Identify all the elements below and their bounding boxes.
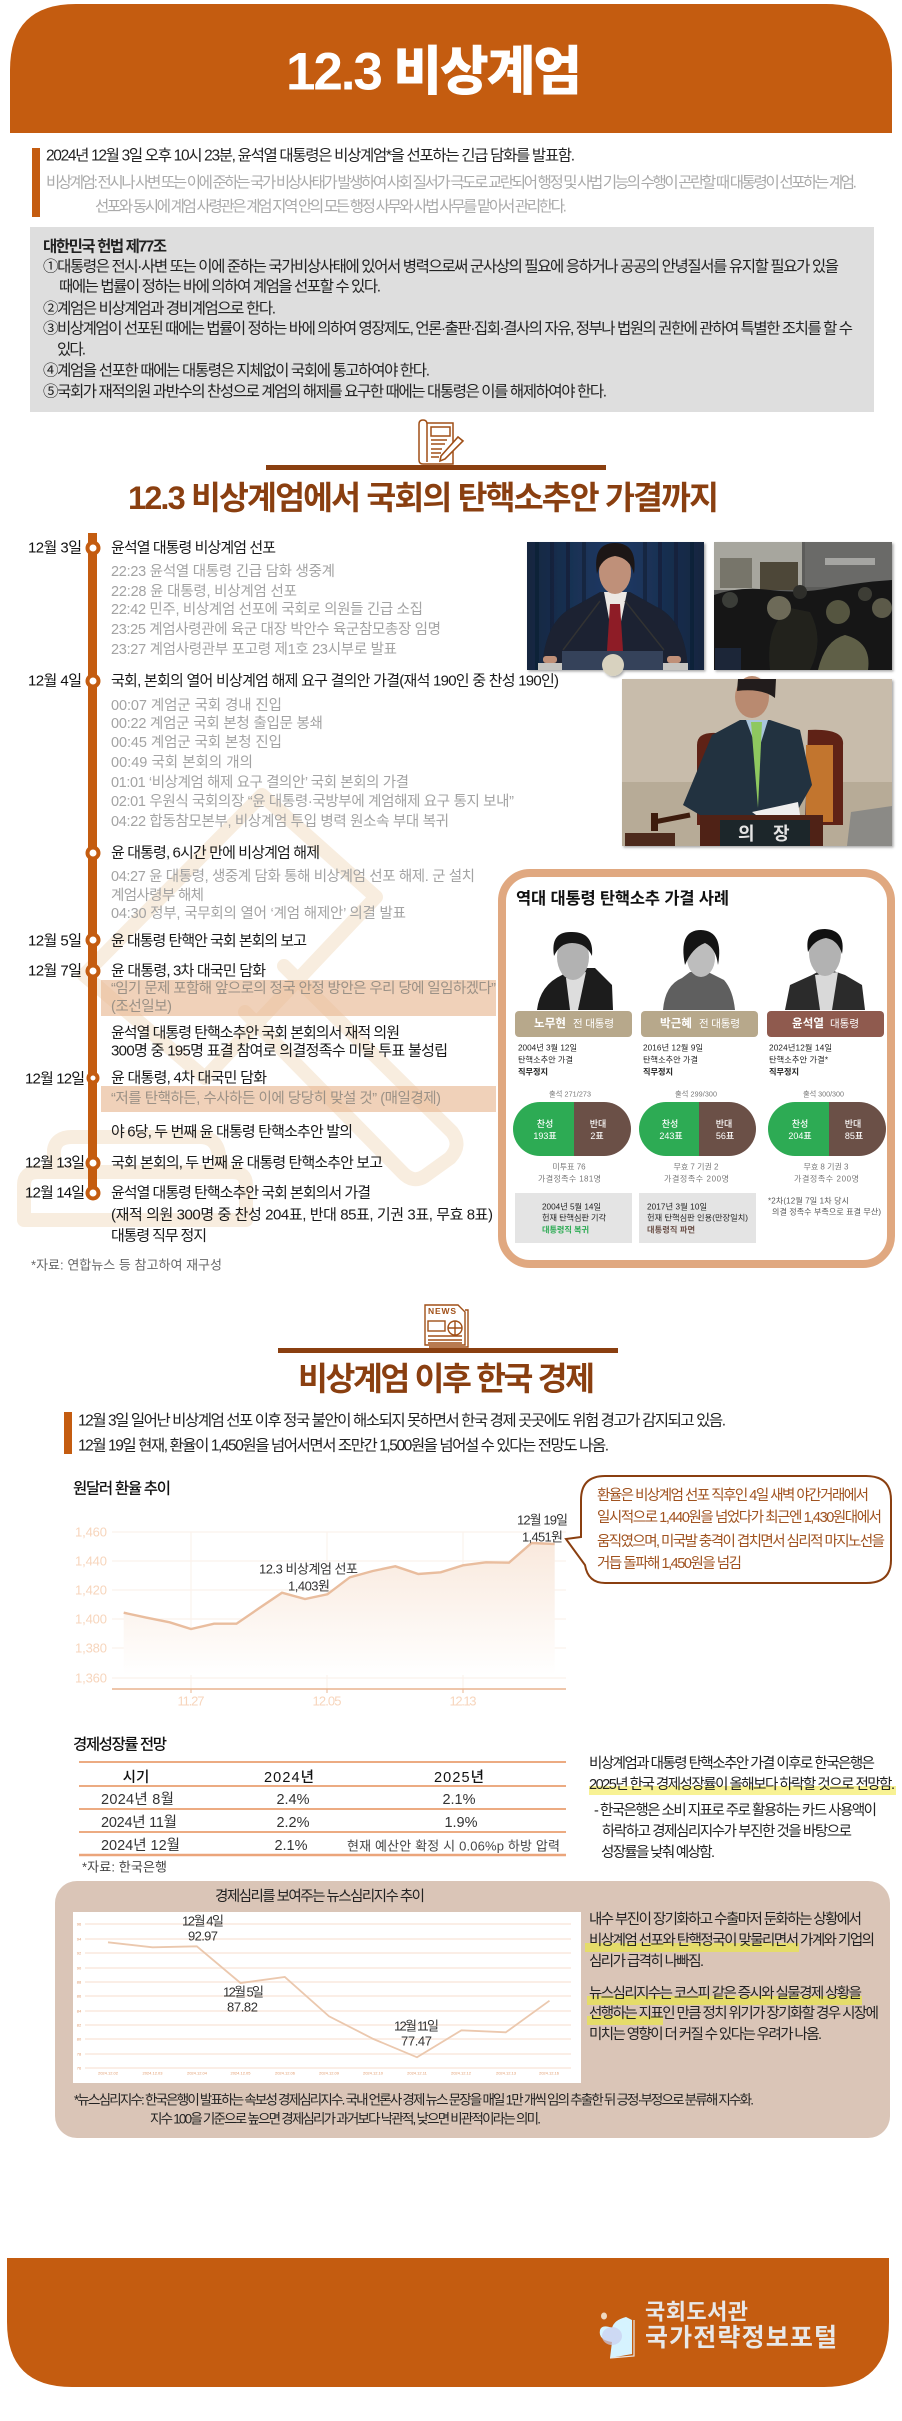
december 3 events: 22:23 윤석열 대통령 긴급 담화 생중계 — [111, 563, 335, 580]
column: Roh Moo-hyun: 직무정지 — [518, 1066, 548, 1076]
december 4 events: 윤 대통령, 6시간 만에 비상계엄 해제 — [111, 844, 320, 862]
line chart: news sentiment: 84 — [77, 2008, 82, 2014]
table: growth forecast: 현재 예산안 확정 시 0.06%p 하방 압력 — [347, 1838, 560, 1854]
date markers — [88, 542, 98, 1198]
line chart: news sentiment: 12월 11일 — [394, 2018, 439, 2034]
nameplate text: 의 — [738, 824, 755, 844]
line chart: news sentiment: 90 — [77, 1966, 82, 1970]
table: growth forecast: 2.2% — [276, 1815, 310, 1831]
column: Yoon Suk-yeol: 85표 — [845, 1131, 863, 1141]
december 4 events: 01:01 ‘비상계엄 해제 요구 결의안’ 국회 본회의 가결 — [111, 774, 409, 791]
column: Yoon Suk-yeol: 2024년12월 14일 — [769, 1042, 832, 1052]
column: Roh Moo-hyun: 2004년 3월 12일 — [518, 1042, 577, 1052]
column: Yoon Suk-yeol: 직무정지 — [769, 1066, 799, 1076]
december 4 events: 계엄사령부 해체 — [111, 887, 204, 904]
line chart: news sentiment: 77.47 — [401, 2034, 432, 2048]
december 4 events: 국회, 본회의 열어 비상계엄 해제 요구 결의안 가결(재석 190인 중 찬성 190인) — [111, 672, 559, 690]
table: growth forecast: 2024년 — [264, 1769, 314, 1786]
column: Park Geun-hye: 헌재 탄핵심판 인용(만장일치) — [647, 1212, 748, 1222]
line chart: won-dollar exchange rate: 1,360 — [75, 1670, 107, 1686]
column: Roh Moo-hyun: 2004년 5월 14일 — [542, 1202, 601, 1212]
december 4 events: 00:49 국회 본회의 개의 — [111, 754, 253, 771]
december 12 to 14 events: 윤 대통령, 4차 대국민 담화 — [111, 1070, 267, 1086]
portrait: Park — [663, 930, 735, 1010]
column: Park Geun-hye: 대통령직 파면 — [647, 1224, 695, 1234]
line chart: won-dollar exchange rate: 12.3 비상계엄 선포 — [259, 1562, 358, 1576]
line chart: news sentiment: 2024.12.02 — [98, 2070, 119, 2076]
december 5 to 7 events: (조선일보) — [111, 998, 172, 1015]
panel: news sentiment index — [55, 1881, 890, 2138]
column: Park Geun-hye: 전 대통령 — [699, 1018, 740, 1030]
december 3 events — [111, 540, 441, 658]
icon: notebook and pen — [419, 420, 463, 464]
december 4 events: 02:01 우원식 국회의장 “윤 대통령·국방부에 계엄해제 요구 통지 보내” — [111, 793, 514, 810]
panel: constitution article 77: ①대통령은 전시·사변 또는 이에 준하는 국가비상사태에 있어서 병력으로써 군사상의 필요에 응하거나 공공의 안녕질서를 유지할 필요가 있을 — [43, 258, 839, 276]
line chart: news sentiment: 76 — [77, 2066, 82, 2070]
intro statement: 2024년 12월 3일 오후 10시 23분, 윤석열 대통령은 비상계엄*을 선포하는 긴급 담화를 발표함. — [46, 146, 575, 164]
table: growth forecast: 2024년 12월 — [101, 1837, 180, 1854]
line chart: won-dollar exchange rate: 12월 19일 — [517, 1512, 568, 1528]
december 12 to 14 events: 야 6당, 두 번째 윤 대통령 탄핵소추안 발의 — [111, 1124, 353, 1140]
line chart: won-dollar exchange rate: 1,440 — [75, 1554, 107, 1568]
footnote: news sentiment index — [74, 2092, 754, 2126]
date labels: 12월 3일 — [28, 540, 82, 556]
line chart: news sentiment: 96 — [77, 1922, 82, 1926]
photo: soldiers at national assembly — [714, 542, 892, 670]
callout: exchange rate note: 움직였으며, 미국발 충격이 겹치면서 심리적 마지노선을 — [597, 1533, 885, 1550]
growth commentary: - 한국은행은 소비 지표로 주로 활용하는 카드 사용액이 — [594, 1802, 877, 1819]
line chart: news sentiment: 2024.12.03 — [142, 2070, 163, 2076]
economy summary: 12월 3일 일어난 비상계엄 선포 이후 정국 불안이 해소되지 못하면서 한국 경제 곳곳에도 위험 경고가 감지되고 있음. — [78, 1412, 726, 1430]
column: Yoon Suk-yeol: 대통령 — [830, 1018, 859, 1030]
date labels: 12월 4일 — [28, 672, 82, 690]
column: Yoon Suk-yeol: *2차(12월 7일 1차 당시 — [768, 1196, 849, 1206]
panel: constitution article 77: 대한민국 헌법 제77조 — [43, 238, 167, 256]
sentiment commentary: 미치는 영향이 더 커질 수 있다는 우려가 나옴. — [589, 2026, 822, 2043]
column: Yoon Suk-yeol: 무효 8 기권 3 — [803, 1162, 849, 1172]
december 12 to 14 events — [101, 1070, 496, 1244]
table: growth forecast: 2024년 11월 — [101, 1814, 177, 1831]
intro statement: 선포와 동시에 계엄 사령관은 계엄 지역 안의 모든 행정 사무와 사법 사무를 맡아서 관리한다. — [95, 198, 567, 216]
column: Yoon Suk-yeol: 탄핵소추안 가결* — [769, 1054, 829, 1064]
card heading: 역대 대통령 탄핵소추 가결 사례 — [516, 889, 729, 908]
sentiment commentary — [585, 1911, 879, 2043]
line chart: news sentiment — [73, 1912, 581, 2083]
column: Park Geun-hye: 2016년 12월 9일 — [643, 1042, 703, 1052]
column: Park Geun-hye: 직무정지 — [643, 1066, 673, 1076]
column: Park Geun-hye: 2017년 3월 10일 — [647, 1202, 707, 1212]
line chart: news sentiment: 80 — [77, 2036, 82, 2042]
sentiment commentary: 내수 부진이 장기화하고 수출마저 둔화하는 상황에서 — [589, 1911, 862, 1928]
line chart: news sentiment: 2024.12.12 — [451, 2070, 472, 2076]
column: Yoon Suk-yeol: 찬성 — [792, 1119, 808, 1129]
december 5 to 7 events: “임기 문제 포함해 앞으로의 정국 안정 방안은 우리 당에 일임하겠다” — [111, 980, 496, 997]
line chart: won-dollar exchange rate: 1,460 — [75, 1524, 107, 1540]
date labels: 12월 13일 — [25, 1154, 85, 1172]
column: Roh Moo-hyun: 대통령직 복귀 — [542, 1224, 589, 1234]
column: Park Geun-hye: 243표 — [659, 1131, 683, 1141]
line chart: news sentiment: 2024.12.09 — [319, 2070, 340, 2076]
line chart: won-dollar exchange rate: 1,420 — [75, 1582, 107, 1598]
portrait: Yoon — [785, 929, 865, 1010]
section divider and heading: economy: 비상계엄 이후 한국 경제 — [298, 1361, 595, 1397]
column: Park Geun-hye: 무효 7 기권 2 — [673, 1162, 719, 1172]
line chart: news sentiment: 2024.12.11 — [407, 2070, 428, 2076]
panel: constitution article 77: ④계엄을 선포한 때에는 대통령은 지체없이 국회에 통고하여야 한다. — [43, 362, 430, 380]
line chart: news sentiment: 2024.12.16 — [539, 2070, 560, 2076]
line chart: news sentiment: 92 — [77, 1950, 82, 1956]
line chart: news sentiment: 78 — [77, 2052, 82, 2056]
column: Park Geun-hye: 찬성 — [662, 1119, 678, 1129]
callout: exchange rate note — [566, 1476, 891, 1583]
panel: constitution article 77: 있다. — [57, 340, 86, 358]
column: Yoon Suk-yeol: 반대 — [845, 1118, 861, 1129]
column: Roh Moo-hyun: 2표 — [590, 1131, 604, 1141]
column: Roh Moo-hyun: 탄핵소추안 가결 — [518, 1054, 573, 1064]
title: 12.3 비상계엄 — [286, 42, 582, 102]
panel: constitution article 77: ③비상계엄이 선포된 때에는 법률이 정하는 바에 의하여 영장제도, 언론·출판·집회·결사의 자유, 정부나 법원의 권한에 관하여 특별한 조치를 할 수 — [43, 320, 853, 338]
intro statement: 비상계엄: 전시나 사변 또는 이에 준하는 국가 비상사태가 발생하여 사회 질서가 극도로 교란되어 행정 및 사법 기능의 수행이 곤란할 때 대통령이 선포하는 계엄. — [46, 174, 857, 192]
column: Roh Moo-hyun: 가결정족수 181명 — [538, 1174, 601, 1184]
december 3 events: 23:25 계엄사령관에 육군 대장 박안수 육군참모총장 임명 — [111, 621, 441, 638]
december 4 events: 00:07 계엄군 국회 경내 진입 — [111, 697, 282, 714]
section divider and heading: economy — [278, 1348, 618, 1397]
column: Roh Moo-hyun: 찬성 — [537, 1119, 553, 1129]
table: growth forecast: 1.9% — [444, 1815, 478, 1831]
december 5 to 7 events: 윤 대통령, 3차 대국민 담화 — [111, 962, 266, 980]
growth commentary: 비상계엄과 대통령 탄핵소추안 가결 이후로 한국은행은 — [589, 1755, 875, 1772]
growth commentary: 성장률을 낮춰 예상함. — [601, 1844, 715, 1861]
line chart: won-dollar exchange rate: 1,380 — [75, 1640, 107, 1656]
december 4 events: 04:22 합동참모본부, 비상계엄 투입 병력 원소속 부대 복귀 — [111, 813, 449, 830]
december 12 to 14 events: 윤석열 대통령 탄핵소추안 국회 본회의서 가결 — [111, 1184, 371, 1202]
december 3 events: 23:27 계엄사령관부 포고령 제1호 23시부로 발표 — [111, 641, 397, 658]
column: Park Geun-hye: 56표 — [716, 1131, 734, 1141]
panel: constitution article 77: ②계엄은 비상계엄과 경비계엄으로 한다. — [43, 300, 276, 318]
column: Yoon Suk-yeol: 가결정족수 200명 — [794, 1174, 859, 1184]
sentiment commentary: 심리가 급격히 나빠짐. — [589, 1953, 704, 1970]
column: Yoon Suk-yeol: 윤석열 — [792, 1016, 824, 1030]
column: Yoon Suk-yeol — [767, 929, 886, 1216]
icon: newspaper: NEWS — [428, 1306, 456, 1316]
callout: exchange rate note: 일시적으로 1,440원을 넘었다가 최근엔 1,430원대에서 — [597, 1509, 882, 1526]
december 3 events: 22:42 민주, 비상계엄 선포에 국회로 의원들 긴급 소집 — [111, 601, 423, 618]
source note: timeline: *자료: 연합뉴스 등 참고하여 재구성 — [31, 1258, 222, 1272]
line chart: news sentiment: 87.82 — [227, 2000, 258, 2014]
column: Yoon Suk-yeol: 출석 300/300 — [803, 1090, 844, 1098]
nameplate text — [738, 824, 790, 844]
table: growth forecast: 2.1% — [274, 1838, 308, 1854]
december 4 events — [111, 672, 559, 922]
line chart: news sentiment: 88 — [77, 1980, 82, 1984]
panel heading: 경제심리를 보여주는 뉴스심리지수 추이 — [215, 1888, 425, 1905]
watermark: gavel — [24, 795, 457, 1220]
column: Park Geun-hye: 가결정족수 200명 — [664, 1174, 729, 1184]
december 5 to 7 events: 윤 대통령 탄핵안 국회 본회의 보고 — [111, 932, 307, 950]
column: Park Geun-hye: 탄핵소추안 가결 — [643, 1054, 698, 1064]
sentiment commentary: 선행하는 지표인 만큼 정치 위기가 장기화할 경우 시장에 — [589, 2005, 879, 2022]
source note: table: *자료: 한국은행 — [82, 1860, 167, 1874]
photo: assembly speaker with gavel — [622, 676, 892, 846]
economy summary — [64, 1412, 726, 1454]
december 5 to 7 events: 300명 중 195명 표결 참여로 의결정족수 미달 투표 불성립 — [111, 1042, 448, 1060]
portrait: Roh — [537, 932, 613, 1010]
december 3 events: 윤석열 대통령 비상계엄 선포 — [111, 540, 276, 556]
chart heading: growth forecast: 경제성장률 전망 — [73, 1736, 167, 1754]
panel: past presidential impeachment cases — [502, 873, 891, 1264]
column: Roh Moo-hyun: 반대 — [590, 1118, 606, 1129]
panel: constitution article 77 — [30, 227, 874, 412]
growth commentary: 2025년 한국 경제성장률이 올해보다 하락할 것으로 전망함. — [589, 1776, 895, 1793]
callout: exchange rate note: 거듭 돌파해 1,450원을 넘김 — [597, 1555, 742, 1572]
december 4 events: 00:22 계엄군 국회 본청 출입문 봉쇄 — [111, 715, 323, 732]
timeline — [25, 533, 559, 1244]
column: Yoon Suk-yeol: 의결 정족수 부족으로 표결 무산) — [772, 1206, 881, 1216]
line chart: news sentiment: 2024.12.13 — [496, 2070, 517, 2076]
column: Roh Moo-hyun — [513, 932, 632, 1243]
table: growth forecast: 2.4% — [276, 1792, 310, 1808]
line chart: news sentiment: 2024.12.06 — [275, 2070, 296, 2076]
footnote: news sentiment index: 지수 100을 기준으로 높으면 경제심리가 과거보다 낙관적, 낮으면 비관적이라는 의미. — [150, 2112, 541, 2126]
line chart: won-dollar exchange rate: 11.27 — [178, 1694, 204, 1708]
line chart: news sentiment: 2024.12.10 — [363, 2070, 384, 2076]
date labels: 12월 12일 — [25, 1070, 85, 1088]
line chart: news sentiment: 2024.12.04 — [187, 2070, 208, 2076]
table: growth forecast: 2025년 — [434, 1769, 484, 1786]
column: Roh Moo-hyun: 헌재 탄핵심판 기각 — [542, 1212, 606, 1222]
line chart: won-dollar exchange rate: 1,451원 — [522, 1530, 563, 1544]
column: Roh Moo-hyun: 193표 — [533, 1131, 557, 1141]
column: Roh Moo-hyun: 노무현 — [534, 1016, 566, 1030]
callout: exchange rate note: 환율은 비상계엄 선포 직후인 4일 새벽 야간거래에서 — [597, 1487, 869, 1504]
december 4 events: 04:30 정부, 국무회의 열어 ‘계엄 해제안’ 의결 발표 — [111, 905, 406, 922]
column: Park Geun-hye: 출석 299/300 — [675, 1090, 717, 1098]
section divider and heading: timeline: 12.3 비상계엄에서 국회의 탄핵소추안 가결까지 — [128, 480, 719, 516]
icon: library logo — [600, 2312, 634, 2358]
column: Roh Moo-hyun: 출석 271/273 — [549, 1090, 591, 1098]
december 12 to 14 events: 국회 본회의, 두 번째 윤 대통령 탄핵소추안 보고 — [111, 1154, 383, 1172]
line chart: news sentiment: 12월 4일 — [182, 1914, 224, 1928]
column: Park Geun-hye — [639, 930, 758, 1243]
date labels: 12월 7일 — [28, 962, 82, 980]
column: Park Geun-hye: 반대 — [716, 1118, 732, 1129]
intro statement — [32, 146, 857, 217]
december 5 to 7 events: 윤석열 대통령 탄핵소추안 국회 본회의서 재적 의원 — [111, 1024, 400, 1042]
chart heading: exchange rate: 원달러 환율 추이 — [73, 1480, 171, 1498]
line chart: news sentiment: 86 — [77, 1994, 82, 1998]
december 3 events: 22:28 윤 대통령, 비상계엄 선포 — [111, 583, 297, 600]
organisation name: 국회도서관 — [645, 2300, 748, 2324]
footer banner — [7, 2258, 889, 2387]
column: Roh Moo-hyun: 전 대통령 — [573, 1018, 614, 1030]
december 12 to 14 events: (재적 의원 300명 중 찬성 204표, 반대 85표, 기권 3표, 무효 8표) — [111, 1206, 493, 1224]
date labels: 12월 5일 — [28, 932, 82, 950]
line chart: news sentiment: 12월 5일 — [223, 1984, 264, 2000]
december 4 events: 04:27 윤 대통령, 생중계 담화 통해 비상계엄 선포 해제. 군 설치 — [111, 868, 475, 885]
nameplate text: 장 — [773, 824, 790, 844]
organisation name — [645, 2300, 837, 2352]
line chart: won-dollar exchange rate: 12.05 — [312, 1694, 342, 1708]
table: growth forecast: 시기 — [123, 1769, 149, 1786]
date labels: 12월 14일 — [25, 1184, 85, 1202]
line chart: won-dollar exchange rate — [75, 1512, 568, 1708]
icon: newspaper — [425, 1305, 468, 1347]
growth commentary — [589, 1755, 896, 1861]
organisation name: 국가전략정보포털 — [645, 2324, 837, 2352]
line chart: won-dollar exchange rate: 1,400 — [75, 1612, 107, 1626]
december 5 to 7 events — [101, 932, 496, 1060]
december 12 to 14 events: “저를 탄핵하든, 수사하든 이에 당당히 맞설 것” (매일경제) — [111, 1090, 441, 1107]
sentiment commentary: 뉴스심리지수는 코스피 같은 증시와 실물경제 상황을 — [589, 1985, 862, 2002]
line chart: won-dollar exchange rate: 12.13 — [450, 1694, 476, 1708]
economy summary: 12월 19일 현재, 환율이 1,450원을 넘어서면서 조만간 1,500원을 넘어설 수 있다는 전망도 나옴. — [78, 1436, 609, 1454]
photo: president at podium — [527, 542, 704, 676]
table: growth forecast: 2.1% — [442, 1792, 476, 1808]
footnote: news sentiment index: *뉴스심리지수: 한국은행이 발표하는 속보성 경제심리지수. 국내 언론사 경제 뉴스 문장을 매일 1만 개씩 임의 추출한 뒤 긍정·부정으로 분류해 지수화. — [74, 2092, 754, 2108]
header banner — [10, 4, 892, 133]
line chart: news sentiment: 94 — [77, 1936, 82, 1942]
column: Roh Moo-hyun: 미투표 76 — [552, 1162, 586, 1172]
december 4 events: 00:45 계엄군 국회 본청 진입 — [111, 734, 282, 751]
line chart: news sentiment: 82 — [77, 2022, 82, 2028]
line chart: won-dollar exchange rate: 1,403원 — [288, 1578, 330, 1594]
date labels — [25, 540, 85, 1202]
growth commentary: 하락하고 경제심리지수가 부진한 것을 바탕으로 — [602, 1823, 852, 1840]
line chart: news sentiment: 92.97 — [188, 1928, 218, 1944]
panel: constitution article 77: ⑤국회가 재적의원 과반수의 찬성으로 계엄의 해제를 요구한 때에는 대통령은 이를 해제하여야 한다. — [43, 382, 607, 400]
column: Yoon Suk-yeol: 204표 — [788, 1131, 812, 1141]
table: growth forecast: 2024년 8월 — [101, 1791, 174, 1808]
table: growth forecast — [79, 1762, 566, 1855]
panel: constitution article 77: 때에는 법률이 정하는 바에 의하여 계엄을 선포할 수 있다. — [59, 278, 381, 296]
sentiment commentary: 비상계엄 선포와 탄핵정국이 맞물리면서 가계와 기업의 — [589, 1932, 875, 1949]
line chart: news sentiment: 2024.12.05 — [230, 2070, 251, 2076]
timeline spine — [88, 533, 97, 1198]
december 12 to 14 events: 대통령 직무 정지 — [111, 1228, 207, 1244]
column: Park Geun-hye: 박근혜 — [660, 1016, 692, 1030]
